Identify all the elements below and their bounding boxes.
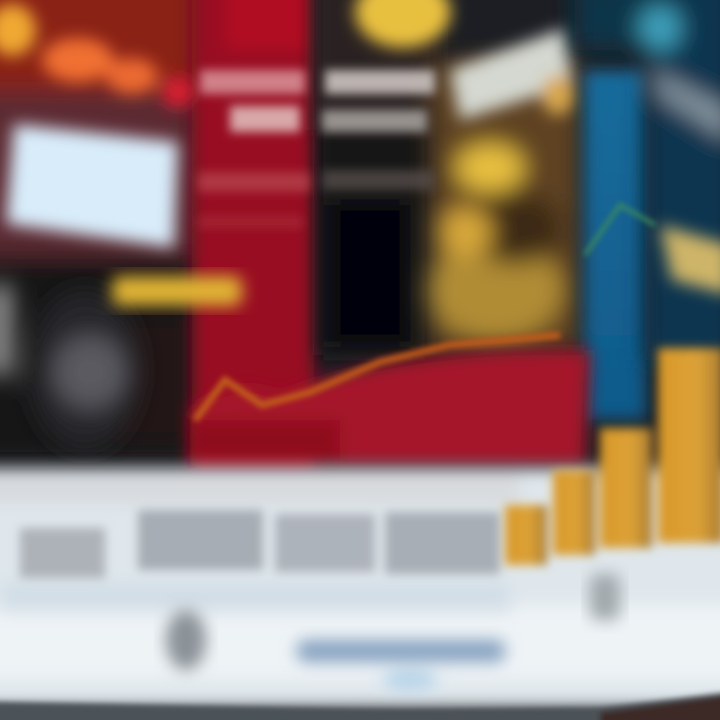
chart: gold coin bars: [505, 348, 720, 565]
callout: gold label: [112, 276, 242, 306]
icon: gold ribbon right: [660, 225, 720, 295]
text block: blurred caption: [297, 640, 505, 689]
chart: red wave panel: [190, 350, 590, 465]
figure: person silhouette: [0, 285, 140, 450]
panel: navy right area: [575, 0, 720, 360]
icon: monitor screen: [6, 124, 178, 248]
chart: green trend line: [585, 205, 655, 255]
text block: blurred headline on white panel: [20, 510, 500, 578]
panel: blue column: [584, 70, 646, 420]
icon: ceiling lamp: [355, 0, 451, 48]
panel: left dark area: [0, 0, 200, 460]
bottom dark edge: [0, 692, 720, 720]
panel: light banner top right: [450, 28, 574, 120]
panel: black column: [314, 0, 439, 355]
icon: round weight left: [166, 610, 206, 670]
panel: white lower desk: [0, 468, 720, 708]
panel: red column: [192, 0, 314, 470]
icon: small grey object right: [590, 574, 620, 620]
text block: blurred subtitle: [198, 170, 434, 228]
heading: blurred title on red and black: [200, 70, 435, 132]
top-left lights: [0, 4, 194, 108]
chart: orange trend line: [195, 335, 560, 420]
panel: gold coin area: [427, 60, 580, 350]
